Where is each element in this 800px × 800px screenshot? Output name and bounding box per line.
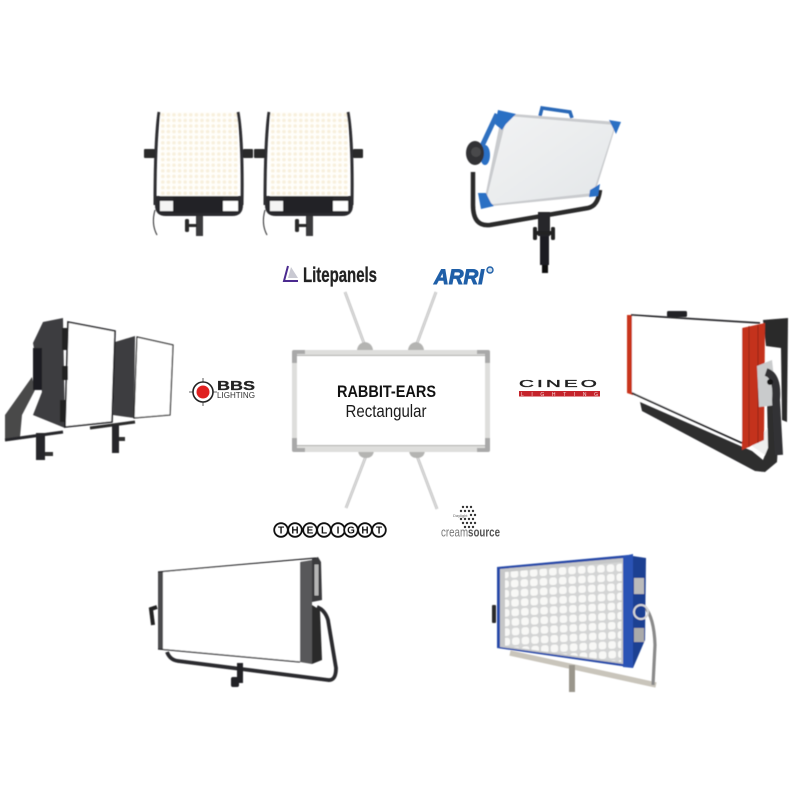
logo: ARRI: ARRI [433, 266, 485, 289]
logo: TheLight: L [321, 526, 327, 537]
fixture: ARRI panel [466, 108, 621, 273]
central rabbit-ears frame [292, 292, 490, 509]
ear: bottom right [409, 451, 437, 509]
logo: TheLight: H [361, 526, 369, 537]
subtitle: Rectangular: Rectangular [346, 401, 427, 421]
logo: Creamsource: creamsource [441, 526, 500, 540]
fixture: BBS twin panels [5, 318, 173, 460]
BBS small panel [90, 336, 173, 453]
logo: Litepanels [284, 264, 377, 287]
logo: BBS Lighting: BBS [217, 378, 255, 393]
fixture: Creamsource panel [492, 554, 656, 692]
logo: Cineo Lighting [519, 379, 600, 398]
logo: TheLight [274, 523, 386, 537]
whiteboard frame [292, 350, 490, 452]
ear: top left [345, 292, 373, 350]
logo: TheLight: T [278, 526, 284, 537]
logo: Creamsource [441, 506, 500, 540]
logo: BBS Lighting: LIGHTING [217, 390, 255, 400]
Litepanels panel right [254, 112, 363, 236]
fixture: Litepanels twin panels [144, 112, 363, 236]
logo: TheLight: I [337, 526, 340, 537]
logo: TheLight: T [376, 526, 382, 537]
fixture: Velvet panel [151, 557, 336, 687]
ear: bottom left [346, 451, 374, 508]
logo: Creamsource: Daylight [453, 513, 468, 518]
logo: Cineo Lighting: LIGHTING [521, 392, 598, 398]
logo: BBS Lighting [189, 378, 255, 406]
logo: Cineo Lighting: CINEO [519, 379, 600, 390]
logo: Litepanels: Litepanels [303, 264, 377, 287]
Litepanels panel left [144, 112, 253, 236]
fixture: Cineo panel [627, 311, 788, 472]
BBS large panel [5, 318, 115, 460]
logo: TheLight: E [307, 526, 314, 537]
title: RABBIT-EARS: RABBIT-EARS [337, 382, 436, 401]
logo: TheLight: H [291, 526, 299, 537]
ear: top right [408, 292, 436, 350]
logo: TheLight: G [347, 526, 355, 537]
